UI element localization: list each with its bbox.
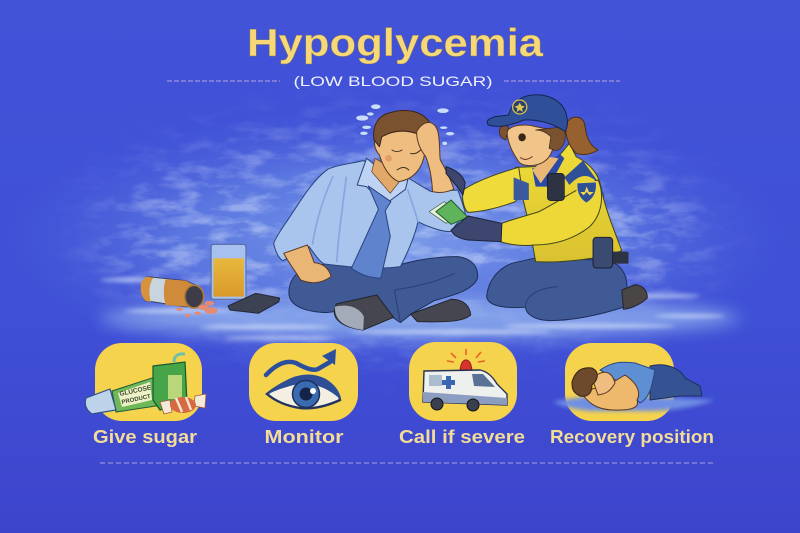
- background glow around scene: [5, 105, 785, 375]
- icon: juice box: [153, 354, 187, 410]
- woman: radio: [547, 173, 564, 201]
- label: call if severe: Call if severe: [399, 426, 525, 447]
- label: recovery position: Recovery position: [550, 426, 714, 447]
- icon: glucose tube: GLUCOSE: [119, 384, 153, 398]
- icon: glucose tube: PRODUCT: [121, 394, 152, 406]
- woman: yellow jacket: [462, 143, 622, 262]
- woman: head: [499, 125, 565, 183]
- icon: wrapped candy: [160, 394, 206, 414]
- icon background: call if severe: [409, 342, 517, 421]
- icon: trend arrow: [266, 349, 336, 375]
- phone: [228, 293, 280, 313]
- woman: belt pouch: [593, 237, 629, 268]
- panel: call if severe: [399, 342, 525, 447]
- man: tie: [351, 186, 391, 278]
- label: monitor: Monitor: [264, 426, 344, 447]
- man: raised forearm and hand: [417, 122, 454, 193]
- bottom dashed rule: [100, 462, 714, 464]
- floor streaks: [100, 278, 725, 340]
- icon background: recovery position: [565, 343, 674, 421]
- icon background: monitor: [249, 343, 358, 421]
- icon: ambulance siren: [447, 349, 485, 371]
- icon: sweat drops: [356, 104, 454, 145]
- man: jeans crossed legs: [289, 257, 478, 323]
- woman: ponytail: [566, 117, 598, 155]
- illustration: main scene: [141, 95, 647, 330]
- spilled pill bottle: [141, 277, 204, 308]
- panel: give sugar: [85, 343, 206, 447]
- woman: boot: [622, 285, 647, 309]
- woman: gloved hands: [446, 167, 502, 242]
- woman: cap: [487, 95, 567, 132]
- woman: trousers: [487, 258, 627, 321]
- man: shoes: [334, 295, 471, 330]
- icon background: give sugar: [95, 343, 202, 421]
- man: shirt: [274, 158, 465, 268]
- icon: ambulance: [423, 370, 507, 411]
- panel: recovery position: [550, 343, 715, 447]
- title: Hypoglycemia: [247, 22, 543, 65]
- woman: shoulder badge: [577, 182, 597, 203]
- subtitle with dashed rules: (LOW BLOOD SUGAR): [294, 73, 492, 89]
- man: neck and head: [372, 110, 438, 193]
- glucose packet: [429, 200, 468, 224]
- icon: glucose tube: [85, 377, 156, 414]
- pills: [176, 301, 218, 317]
- icon: person lying down: [572, 362, 702, 410]
- label: give sugar: Give sugar: [93, 426, 197, 447]
- panel: monitor: [249, 343, 358, 447]
- glass of juice: [211, 244, 246, 299]
- man: forearm and hand on thigh: [284, 245, 331, 283]
- icon: eye: [266, 375, 341, 408]
- floor shadow: [553, 395, 715, 411]
